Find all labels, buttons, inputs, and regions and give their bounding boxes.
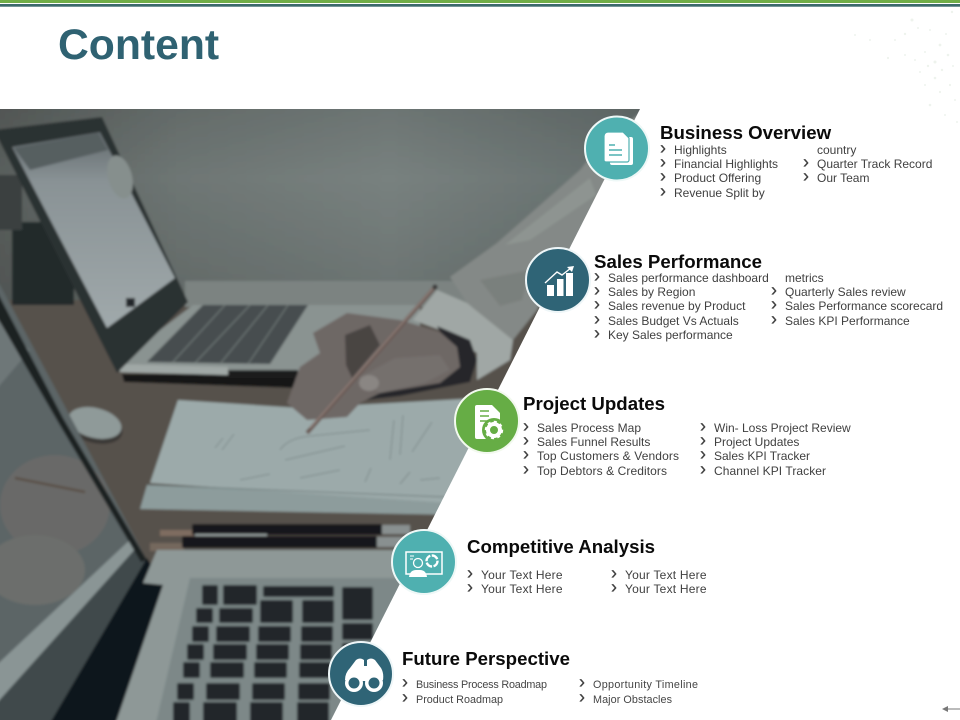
front laptop screen <box>0 240 147 720</box>
list left: › <box>594 309 600 329</box>
list left <box>660 138 778 201</box>
list left: Revenue Split by <box>674 186 765 200</box>
front laptop hinge gap <box>40 558 163 720</box>
arrow: bottom right back navigation <box>942 706 960 712</box>
section: Future Perspective <box>329 642 698 707</box>
list left: › <box>660 181 666 201</box>
list left: Sales Budget Vs Actuals <box>608 314 739 328</box>
list right: › <box>700 416 706 436</box>
list right: country <box>817 143 856 157</box>
list left: Business Process Roadmap <box>416 679 547 691</box>
heading: Sales Performance <box>594 251 762 272</box>
list right: Our Team <box>817 171 869 185</box>
list left: › <box>467 563 473 583</box>
list left: › <box>594 294 600 314</box>
list left: Your Text Here <box>481 582 563 596</box>
list left: Product Roadmap <box>416 694 503 706</box>
list right: Opportunity Timeline <box>593 679 698 691</box>
hand <box>287 313 460 420</box>
list left: › <box>402 687 408 707</box>
list right: Your Text Here <box>625 582 707 596</box>
list right <box>611 563 707 597</box>
keyboard well <box>152 578 420 720</box>
list left: › <box>523 430 529 450</box>
list left: › <box>523 444 529 464</box>
list left: Your Text Here <box>481 568 563 582</box>
list right: › <box>579 687 585 707</box>
header bars <box>0 0 960 7</box>
pencil <box>307 284 438 433</box>
list right: › <box>771 309 777 329</box>
list right: Quarterly Sales review <box>785 285 906 299</box>
list right: › <box>700 459 706 479</box>
list right <box>803 143 932 186</box>
icon: presentation board with people <box>392 530 456 594</box>
list left: Product Offering <box>674 171 761 185</box>
list left: › <box>594 280 600 300</box>
list right: › <box>611 577 617 597</box>
list left: › <box>660 166 666 186</box>
list right: Sales KPI Tracker <box>714 449 810 463</box>
list left: Sales performance dashboard <box>608 271 769 285</box>
back laptop base <box>118 305 420 388</box>
icon: bar chart with arrow <box>526 248 590 312</box>
list left: › <box>523 459 529 479</box>
list right: › <box>771 280 777 300</box>
section: Project Updates <box>455 389 851 479</box>
dark object behind laptop <box>0 175 74 305</box>
list right: Your Text Here <box>625 568 707 582</box>
icon: documents <box>585 116 649 180</box>
list left: › <box>467 577 473 597</box>
list right: Quarter Track Record <box>817 157 932 171</box>
list left <box>467 563 563 597</box>
list left: Key Sales performance <box>608 328 733 342</box>
list right: Channel KPI Tracker <box>714 464 826 478</box>
icon: document with gear <box>455 389 519 453</box>
desk surface <box>12 300 540 566</box>
list left: Sales Process Map <box>537 421 641 435</box>
list left: Top Customers & Vendors <box>537 449 679 463</box>
heading: Business Overview <box>660 122 832 143</box>
list left: › <box>523 416 529 436</box>
list left: Financial Highlights <box>674 157 778 171</box>
list right: › <box>771 294 777 314</box>
list right: › <box>700 430 706 450</box>
back laptop lid <box>0 117 188 373</box>
list right: › <box>803 166 809 186</box>
list right: › <box>700 444 706 464</box>
list left <box>402 672 547 707</box>
list right <box>771 271 943 329</box>
heading: Future Perspective <box>402 648 570 669</box>
list left: › <box>594 323 600 343</box>
list right: › <box>579 672 585 692</box>
wall background <box>0 109 640 302</box>
front laptop base <box>110 550 420 720</box>
list left: Highlights <box>674 143 727 157</box>
list left <box>523 416 679 479</box>
list left: › <box>660 152 666 172</box>
cuff <box>413 290 513 380</box>
heading: Project Updates <box>523 393 665 414</box>
section: Sales Performance <box>526 248 943 343</box>
list right: Project Updates <box>714 435 799 449</box>
photo: laptops on a desk with a hand writing <box>0 90 670 720</box>
cushion band behind laptop <box>185 281 475 307</box>
list left: Sales revenue by Product <box>608 299 746 313</box>
list right: Sales KPI Performance <box>785 314 910 328</box>
front keyboard keys <box>173 585 373 720</box>
list left <box>594 266 769 343</box>
pens <box>150 524 410 551</box>
list right: metrics <box>785 271 824 285</box>
heading: Competitive Analysis <box>467 536 655 557</box>
dark cuff shadow <box>368 326 477 400</box>
list left: › <box>660 138 666 158</box>
list left: › <box>594 266 600 286</box>
arm and shirt sleeve <box>450 105 650 340</box>
list right: Sales Performance scorecard <box>785 299 943 313</box>
notebook papers <box>140 398 480 515</box>
list right: Win- Loss Project Review <box>714 421 851 435</box>
list left: Sales by Region <box>608 285 695 299</box>
section: Competitive Analysis <box>392 530 707 597</box>
list right <box>700 416 851 479</box>
list left: › <box>402 672 408 692</box>
list right: Major Obstacles <box>593 694 673 706</box>
title: Content <box>58 21 219 69</box>
list right: › <box>803 152 809 172</box>
icon: binoculars <box>329 642 393 706</box>
list left: Top Debtors & Creditors <box>537 464 667 478</box>
list right: › <box>611 563 617 583</box>
mouse <box>68 405 123 444</box>
list left: Sales Funnel Results <box>537 435 650 449</box>
decorative splatter top right <box>854 11 958 123</box>
section: Business Overview <box>585 116 932 201</box>
list right <box>579 672 698 707</box>
